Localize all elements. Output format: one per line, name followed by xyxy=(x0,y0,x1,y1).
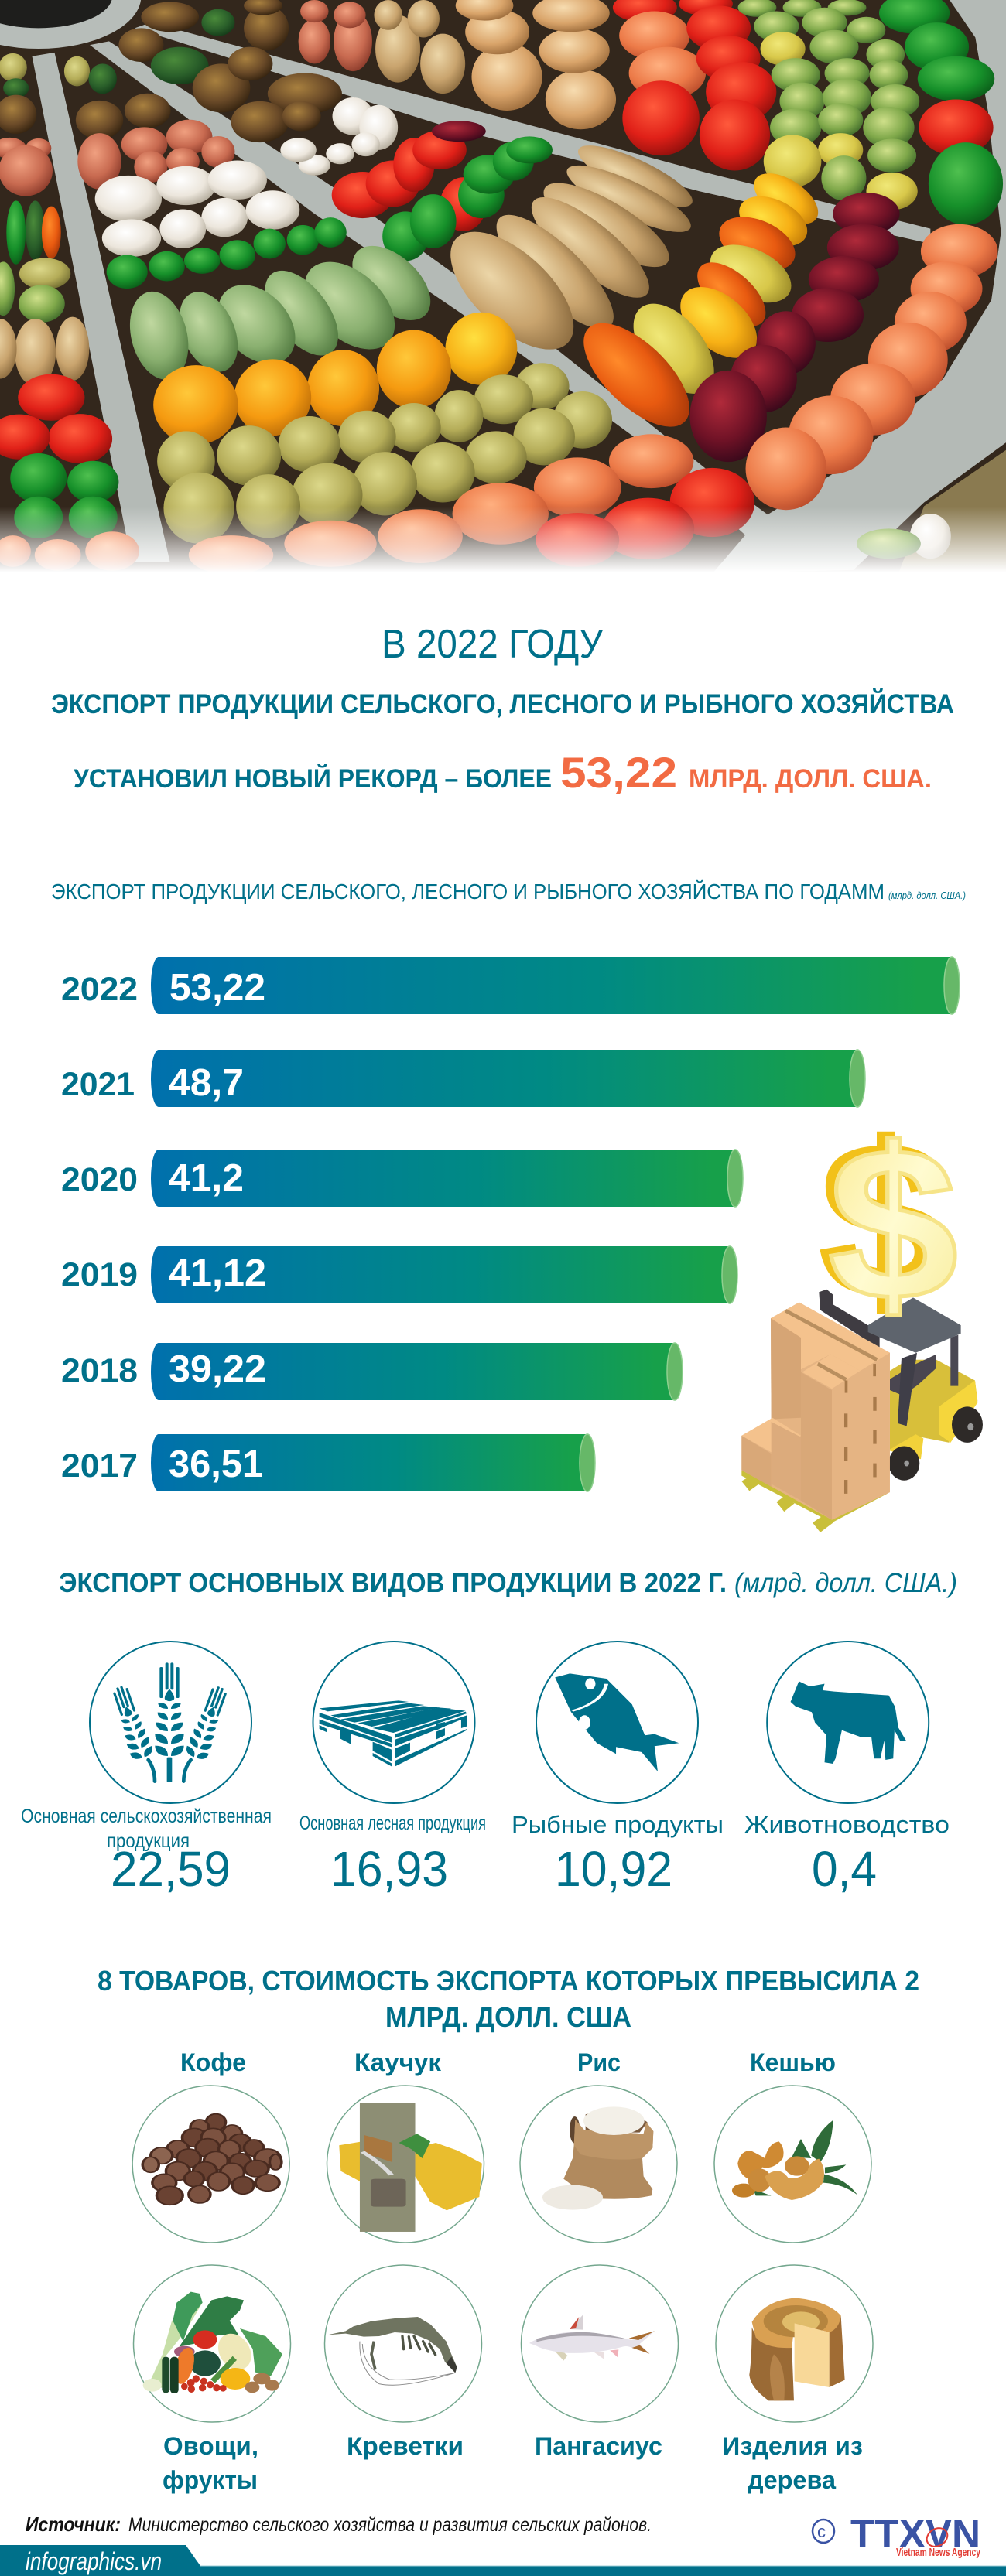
item: livestock: Животноводство xyxy=(744,1811,950,1838)
good: coffee: Кофе xyxy=(180,2048,246,2076)
source note: Министерство сельского хозяйства и развития сельских районов. xyxy=(128,2514,652,2536)
second wedge xyxy=(118,28,163,62)
chart unit: (млрд. долл. США.) xyxy=(888,890,966,901)
heading: export line: ЭКСПОРТ ПРОДУКЦИИ СЕЛЬСКОГО, ЛЕСНОГО И РЫБНОГО ХОЗЯЙСТВА xyxy=(51,688,954,719)
bar 2020 xyxy=(61,1150,743,1207)
footer bar: infographics.vn xyxy=(26,2547,162,2575)
item: fish: 10,92 xyxy=(555,1841,672,1897)
bar 2018: 39,22 xyxy=(169,1348,266,1390)
bar 2022: 2022 xyxy=(61,971,138,1008)
item: agriculture: Основная сельскохозяйственная xyxy=(21,1806,272,1827)
section title: ЭКСПОРТ ОСНОВНЫХ ВИДОВ ПРОДУКЦИИ В 2022 Г. xyxy=(59,1568,727,1598)
item: forestry xyxy=(299,1642,486,1897)
label line 2: фрукты xyxy=(163,2466,258,2494)
item: forestry: 16,93 xyxy=(330,1841,448,1897)
key figure: 53,22 xyxy=(560,748,677,797)
good: rubber: Каучук xyxy=(354,2048,442,2076)
item: agriculture: 22,59 xyxy=(111,1841,231,1897)
bar 2019 xyxy=(61,1246,737,1303)
chart title: ЭКСПОРТ ПРОДУКЦИИ СЕЛЬСКОГО, ЛЕСНОГО И РЫБНОГО ХОЗЯЙСТВА ПО ГОДАММ xyxy=(51,880,885,904)
item: forestry: Основная лесная продукция xyxy=(299,1812,486,1834)
bar 2021: 48,7 xyxy=(169,1062,244,1104)
icon: dollar sign: $ xyxy=(820,1098,950,1341)
top wedge xyxy=(141,2,199,32)
item: agriculture xyxy=(21,1642,272,1897)
illustration: forklift with dollar sign xyxy=(741,1098,983,1532)
good: rice: Рис xyxy=(577,2048,621,2076)
good: rice xyxy=(520,2048,677,2243)
bar 2019: 41,12 xyxy=(169,1252,266,1294)
bar 2020: 41,2 xyxy=(169,1157,244,1199)
good: rubber xyxy=(327,2048,484,2243)
heading: record line: УСТАНОВИЛ НОВЫЙ РЕКОРД – БОЛЕЕ xyxy=(74,764,552,794)
panel: exports by year xyxy=(51,880,966,1491)
item: agriculture: продукция xyxy=(107,1830,190,1852)
good: vegetables and fruit xyxy=(133,2265,291,2494)
bar 2022 xyxy=(61,957,960,1014)
heading block xyxy=(51,622,954,797)
bar 2021 xyxy=(61,1050,865,1107)
panel: 8 goods over 2 billion xyxy=(98,1965,919,2494)
logo: TTXVN: c xyxy=(817,2522,826,2541)
good: wood products: Изделия из xyxy=(722,2432,863,2460)
left wedge xyxy=(0,53,27,82)
label: Овощи, xyxy=(163,2432,258,2460)
good: shrimp xyxy=(325,2265,481,2460)
icon: dollar sign: $ xyxy=(828,1102,958,1345)
bar 2017: 36,51 xyxy=(169,1443,263,1485)
bar 2018: 2018 xyxy=(61,1352,138,1389)
good: pangasius xyxy=(522,2265,678,2460)
item: livestock: 0,4 xyxy=(812,1841,877,1897)
bar 2017 xyxy=(61,1434,595,1491)
key figure unit: МЛРД. ДОЛЛ. США. xyxy=(689,764,932,794)
item: fish: Рыбные продукты xyxy=(512,1811,724,1838)
source note: Источник: xyxy=(26,2513,121,2536)
third wedge xyxy=(64,56,90,86)
footer bar xyxy=(0,2545,1006,2576)
good: coffee xyxy=(132,2048,289,2243)
item: livestock xyxy=(744,1642,950,1897)
section title line 1: 8 ТОВАРОВ, СТОИМОСТЬ ЭКСПОРТА КОТОРЫХ ПРЕВЫСИЛА 2 xyxy=(98,1965,919,1997)
bar 2022: 53,22 xyxy=(169,967,265,1009)
good: cashew xyxy=(714,2048,871,2243)
bar 2018 xyxy=(61,1343,683,1400)
section title line 2: МЛРД. ДОЛЛ. США xyxy=(385,2001,631,2033)
bar 2020: 2020 xyxy=(61,1161,138,1198)
good: pangasius: Пангасиус xyxy=(535,2432,662,2460)
item: fish xyxy=(512,1642,724,1897)
good: wood products xyxy=(716,2265,873,2494)
good: shrimp: Креветки xyxy=(347,2432,464,2460)
good: cashew: Кешью xyxy=(750,2048,836,2076)
heading: in 2022: В 2022 ГОДУ xyxy=(382,622,604,667)
bar 2019: 2019 xyxy=(61,1256,138,1293)
good: wood products: дерева xyxy=(748,2466,836,2494)
panel: main product types xyxy=(21,1568,957,1897)
bar 2021: 2021 xyxy=(61,1066,135,1103)
hero photo: vegetables and fruit display xyxy=(0,0,1006,588)
logo: TTXVN: TTXVN xyxy=(850,2512,980,2557)
bar 2017: 2017 xyxy=(61,1447,138,1484)
source note xyxy=(26,2513,652,2536)
section unit: (млрд. долл. США.) xyxy=(734,1568,957,1598)
